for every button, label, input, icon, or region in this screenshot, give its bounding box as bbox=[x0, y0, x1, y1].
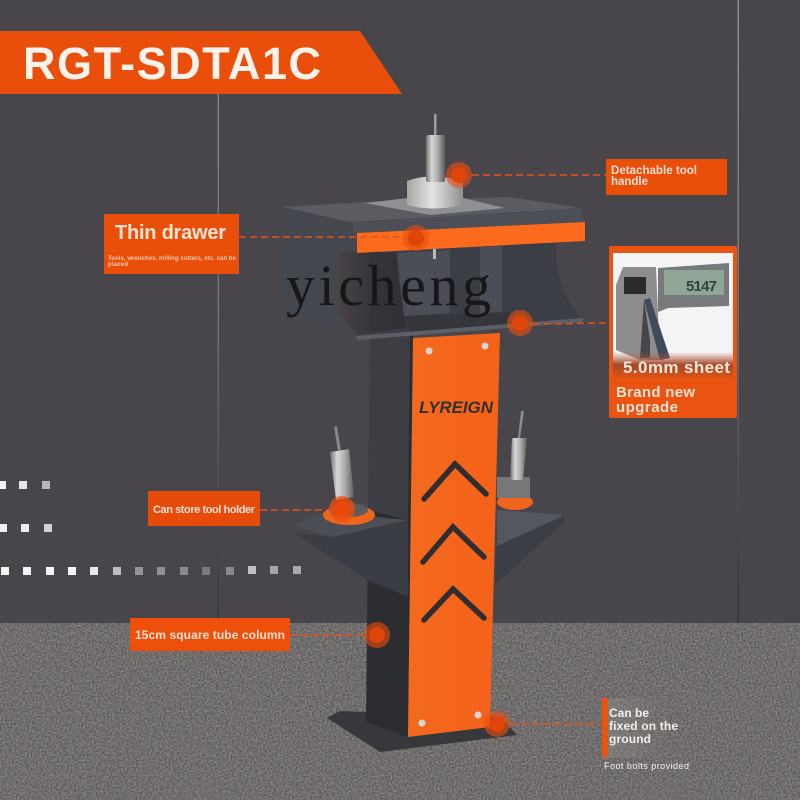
title banner bbox=[0, 31, 402, 94]
callout: square tube column bbox=[130, 618, 390, 651]
callout: can store tool holder: Can store tool holder bbox=[153, 504, 256, 516]
callout: fixed on the ground: fixed on the bbox=[609, 719, 678, 733]
caliper photo bbox=[613, 253, 733, 380]
callout: square tube column: 15cm square tube column bbox=[135, 628, 285, 642]
watermark: yicheng bbox=[286, 253, 491, 318]
orange column panel bbox=[408, 333, 500, 737]
callout: thin drawer: Tools, wrenches, milling cutters, etc. can be bbox=[108, 256, 237, 262]
column bolts bbox=[426, 348, 432, 354]
callout: thin drawer bbox=[104, 214, 429, 274]
callout: fixed on the ground: ground bbox=[609, 732, 651, 746]
callout: fixed on the ground bbox=[484, 698, 689, 771]
base plate bbox=[327, 711, 517, 752]
callout: fixed on the ground: Foot bolts provided bbox=[604, 761, 689, 771]
callout: 5.0mm sheet upgrade panel: upgrade bbox=[616, 399, 678, 416]
chevron slots bbox=[424, 464, 486, 499]
detachable tool handle bbox=[365, 114, 505, 215]
floor bbox=[0, 623, 800, 800]
callout: can store tool holder bbox=[148, 491, 355, 526]
callout: 5.0mm sheet upgrade panel: Brand new bbox=[616, 384, 695, 401]
middle tray bbox=[293, 510, 565, 597]
callout: 5.0mm sheet upgrade panel: 5.0mm sheet bbox=[623, 358, 730, 377]
callout: detachable tool handle bbox=[446, 159, 727, 195]
product: tool stand bbox=[283, 114, 585, 752]
callout: thin drawer: placed bbox=[108, 262, 128, 268]
callout: detachable tool handle: handle bbox=[611, 176, 648, 188]
wall background bbox=[0, 0, 800, 624]
brand logo: LYREIGN bbox=[419, 398, 494, 417]
stored tool holder left bbox=[323, 426, 375, 525]
title banner: RGT-SDTA1C bbox=[23, 38, 321, 89]
top drawer housing bbox=[283, 197, 585, 340]
callout: fixed on the ground: Can be bbox=[609, 706, 649, 720]
callout: 5.0mm sheet upgrade panel bbox=[507, 246, 737, 418]
decorative dots bbox=[0, 481, 301, 575]
callout: thin drawer: Thin drawer bbox=[115, 222, 226, 244]
column side bbox=[366, 335, 413, 737]
callout: detachable tool handle: Detachable tool bbox=[611, 165, 697, 177]
caliper photo: 5147 bbox=[686, 278, 717, 295]
stored tool holder right bbox=[497, 411, 533, 510]
